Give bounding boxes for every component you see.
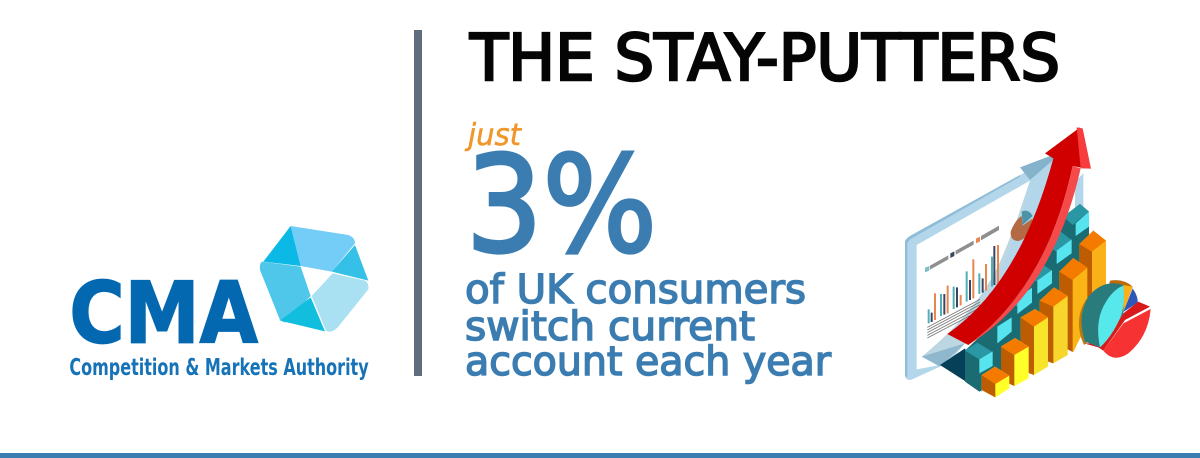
logo letters CMA: CMA bbox=[69, 265, 258, 364]
icon: hexagon logo mark bbox=[260, 226, 369, 332]
statistic description: account each year bbox=[465, 339, 832, 385]
back teal bars bbox=[940, 204, 1089, 392]
label: just: just bbox=[464, 118, 522, 153]
bottom rule bbox=[0, 453, 1200, 458]
statistic: 3%: 3% bbox=[466, 129, 657, 283]
statistic description: switch current bbox=[465, 304, 755, 350]
front orange and yellow bars bbox=[982, 231, 1106, 397]
statistic description bbox=[465, 267, 832, 385]
icon: 3D pie chart bbox=[1079, 280, 1151, 358]
title: THE STAY-PUTTERS bbox=[469, 22, 1060, 96]
vertical divider bbox=[414, 30, 422, 376]
statistic description: of UK consumers bbox=[465, 267, 806, 313]
logo: Competition & Markets Authority bbox=[69, 226, 369, 381]
icon: presentation screen bbox=[905, 156, 1083, 380]
screen mini charts bbox=[925, 211, 1033, 338]
illustration: rising chart with arrow bbox=[905, 127, 1151, 397]
logo strapline: Competition & Markets Authority bbox=[69, 355, 369, 381]
icon: red rising arrow bbox=[947, 127, 1091, 345]
